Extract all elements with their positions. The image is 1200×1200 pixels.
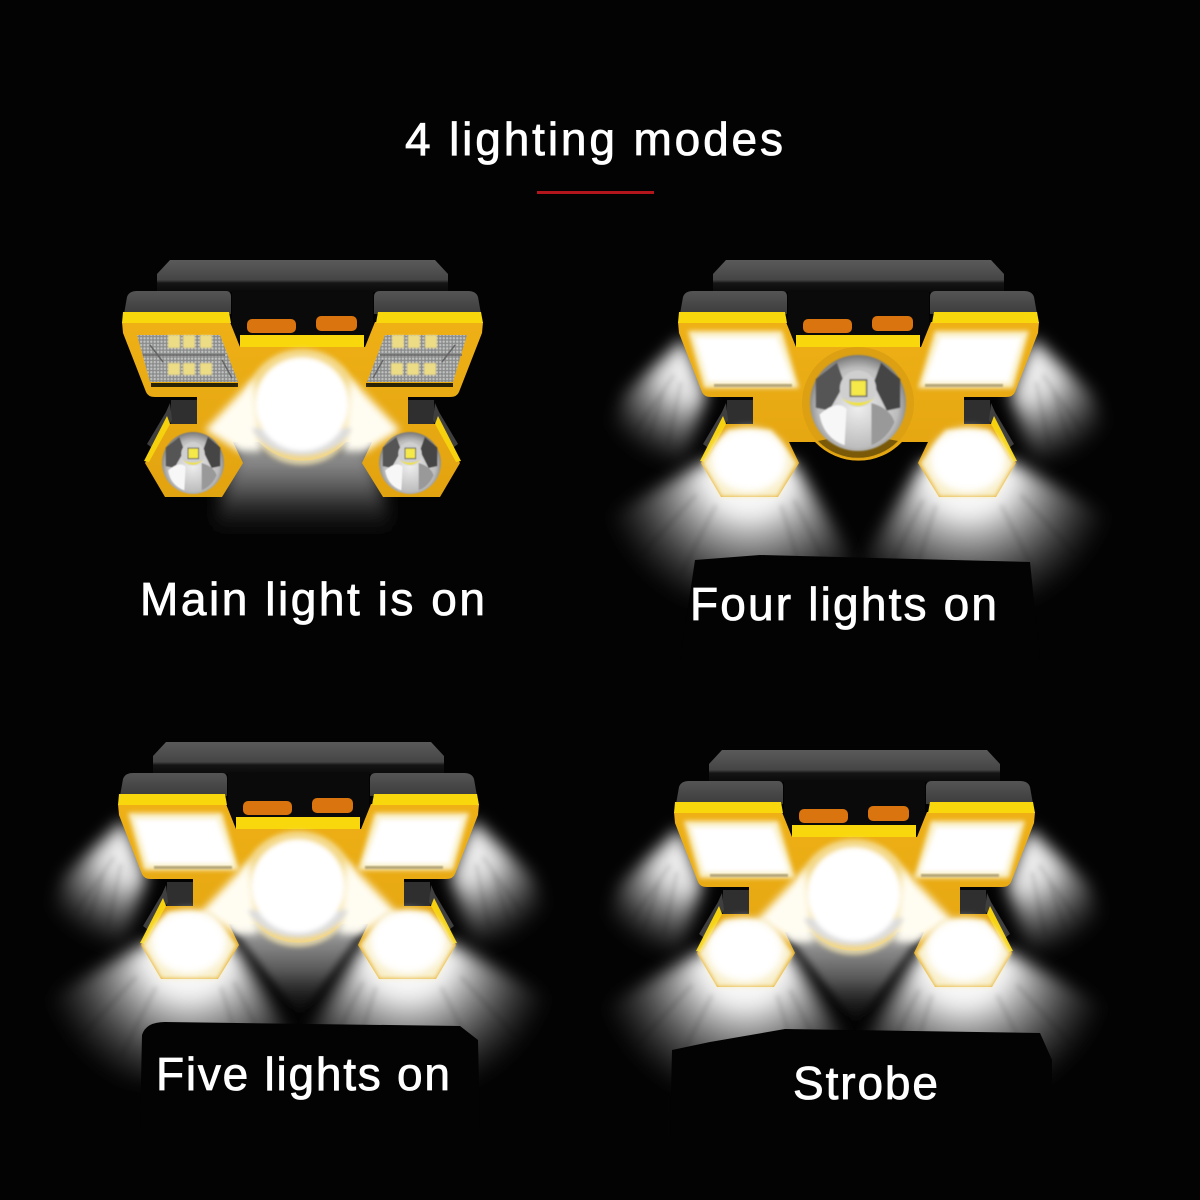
label mask (680, 555, 1040, 660)
lit main lens (205, 349, 400, 465)
headlamp: main light on (122, 260, 483, 540)
headlamp: four lights on (586, 260, 1131, 600)
central reflector (802, 347, 914, 459)
lit lower lights (142, 910, 455, 979)
central cone (784, 930, 924, 1025)
headlamp: strobe (582, 750, 1127, 1090)
lit lower lights (702, 428, 1015, 497)
wing beams (596, 338, 1121, 485)
headlamp: five lights on (26, 742, 571, 1082)
label: strobe (670, 1029, 1052, 1140)
label: five lights on (140, 1022, 480, 1130)
label text: Five lights on (156, 1048, 450, 1100)
left LED panel off (137, 335, 238, 387)
lower beams (582, 952, 1127, 1090)
label mask (670, 1029, 1052, 1140)
lower beams (586, 462, 1131, 600)
title accent line (537, 191, 654, 194)
lit main lens (201, 831, 396, 947)
label mask (140, 1022, 480, 1130)
lit main lens (757, 839, 952, 955)
lit panels (684, 821, 1025, 878)
title: 4 lighting modes (405, 113, 783, 165)
lower light cone (210, 445, 395, 540)
right reflector (379, 432, 441, 494)
wing beams (36, 820, 561, 967)
lamp body (678, 260, 1039, 497)
label: four lights on (680, 555, 1040, 660)
lower beams (26, 944, 571, 1082)
left reflector (162, 432, 224, 494)
lit panels (128, 813, 469, 870)
label: main light is on: Main light is on (140, 573, 485, 625)
label text: Four lights on (690, 578, 997, 630)
right LED panel off (366, 335, 467, 387)
label text: Strobe (793, 1057, 938, 1109)
lamp body (122, 260, 483, 497)
lit panels (688, 331, 1029, 388)
wing beams (592, 828, 1117, 975)
lit lower lights (698, 918, 1011, 987)
lamp body (674, 750, 1035, 987)
lamp body (118, 742, 479, 979)
central cone (228, 922, 368, 1017)
